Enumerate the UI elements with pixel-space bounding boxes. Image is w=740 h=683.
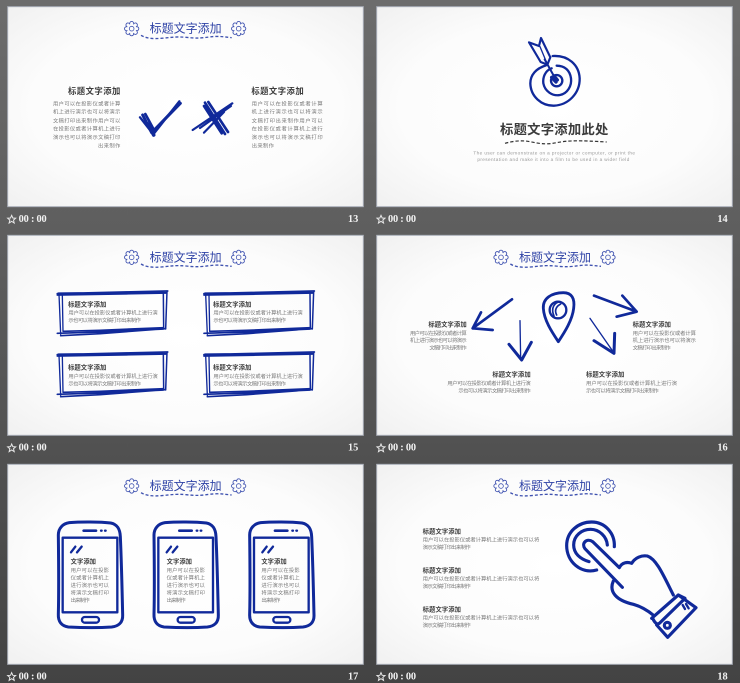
left text block: 在投影仪或者计算机上进行: [53, 125, 121, 133]
slide 17: three phones: [8, 464, 363, 682]
arrow: down: [509, 321, 531, 360]
box: bottom right: [204, 352, 314, 397]
slide title: 标题文字添加: [150, 21, 222, 36]
right text block: 标题文字添加: [251, 86, 304, 96]
text item 3: 演示文稿打印出来制作: [423, 621, 471, 629]
footer: [377, 443, 728, 454]
arrow: down right: [590, 318, 615, 353]
footer: 14: [717, 214, 728, 225]
box: bottom left: 标题文字添加: [68, 362, 106, 371]
phone 1: [58, 522, 123, 628]
text block: right: [633, 319, 697, 351]
footer: 16: [717, 443, 728, 454]
arrow: to right: [594, 296, 637, 317]
right text block: 用户可以在投影仪或者计算: [252, 99, 323, 107]
text block: left: 用户可以在投影仪或者计算: [410, 329, 467, 337]
footer: 18: [717, 671, 728, 682]
phone 1: 出来制作: [71, 596, 90, 604]
footer: [8, 443, 358, 454]
text block: right: 机上进行演示也可以将演示: [633, 336, 696, 344]
footer: 13: [348, 214, 358, 225]
slide title: 标题文字添加: [519, 478, 591, 493]
english description: The user can demonstrate on a projector or computer, or print the: [473, 151, 635, 156]
phone 2: 将演示文稿打印: [167, 589, 205, 597]
text block: left: [410, 319, 467, 351]
phone 1: 文字添加: [71, 557, 96, 566]
box: top left: 用户可以在投影仪或者计算机上进行演: [68, 309, 158, 317]
text block: right: 标题文字添加: [633, 319, 671, 328]
box: bottom right: 示也可以将演示文稿打印出来制作: [213, 379, 287, 387]
slide title: 标题文字添加: [519, 249, 591, 264]
text block: bottom left: 用户可以在投影仪或者计算机上进行演: [447, 379, 531, 387]
box: top right: [204, 291, 314, 336]
right text block: 在投影仪或者计算机上进行: [252, 125, 323, 133]
slide panel: [377, 7, 732, 207]
phone 1: 将演示文稿打印: [71, 589, 109, 597]
phone 2: 进行演示也可以: [167, 581, 206, 589]
phone 1: 进行演示也可以: [71, 581, 110, 589]
footer: 17: [348, 671, 358, 682]
box: top left: [57, 291, 168, 336]
phone 3: 进行演示也可以: [261, 581, 300, 589]
box: top left: 标题文字添加: [68, 299, 106, 308]
right text block: 机上进行演示也可以将演示: [252, 108, 323, 116]
text item 1: [423, 526, 540, 551]
text item 2: 演示文稿打印出来制作: [423, 582, 471, 590]
slide panel: [377, 235, 732, 435]
icon: target with arrow: [529, 38, 580, 106]
english description: presentation and make it into a film to be used in a wider field: [477, 157, 630, 162]
text block: right: 文稿打印出来制作: [633, 343, 671, 351]
slide panel: [8, 7, 363, 207]
slide panel: [377, 464, 732, 664]
slide title: [124, 478, 246, 496]
text item 1: 演示文稿打印出来制作: [423, 543, 471, 551]
slide title: 标题文字添加: [150, 478, 222, 493]
text item 3: [423, 604, 540, 629]
box: bottom left: 示也可以将演示文稿打印出来制作: [68, 379, 142, 387]
footer: 00 : 00: [19, 671, 47, 682]
text item 1: 标题文字添加: [423, 526, 461, 535]
text block: bottom right: 标题文字添加: [586, 370, 624, 379]
text block: right: 用户可以在投影仪或者计算: [633, 329, 697, 337]
text block: left: 机上进行演示也可以将演示: [410, 336, 467, 344]
arrow: to left: [473, 299, 512, 330]
phone 3: 出来制作: [261, 596, 281, 604]
slide 18: touch hand: [377, 464, 732, 682]
text block: left: 文稿打印出来制作: [429, 343, 467, 351]
footer: 00 : 00: [388, 671, 416, 682]
left text block: 演示也可以将演示文稿打印: [53, 133, 120, 141]
footer: 00 : 00: [19, 443, 47, 454]
box: bottom right: 用户可以在投影仪或者计算机上进行演: [213, 372, 303, 380]
slide panel: [8, 235, 363, 435]
phone 3: 用户可以在投影: [261, 566, 300, 574]
box: bottom right: 标题文字添加: [213, 362, 251, 371]
dashed wave: [505, 141, 607, 144]
phone 3: 文字添加: [261, 557, 287, 566]
left text block: 出来制作: [98, 142, 121, 150]
text item 1: 用户可以在投影仪或者计算机上进行演示也可以将: [423, 536, 540, 544]
footer: 00 : 00: [388, 443, 416, 454]
text item 3: 用户可以在投影仪或者计算机上进行演示也可以将: [423, 614, 540, 622]
text block: bottom left: 示也可以将演示文稿打印出来制作: [458, 386, 531, 394]
phone 2: [154, 522, 218, 628]
slide 14: target: [377, 7, 732, 225]
box: top right: 标题文字添加: [213, 299, 251, 308]
slide title: 标题文字添加: [150, 249, 222, 264]
left text block: 标题文字添加: [68, 86, 120, 96]
text block: bottom right: [586, 370, 678, 394]
icon: cross mark: [193, 102, 232, 134]
slide title: [494, 478, 615, 496]
right text block: [251, 86, 323, 150]
phone 2: 仪或者计算机上: [167, 573, 206, 581]
text block: left: 标题文字添加: [428, 319, 467, 328]
box: bottom left: [57, 352, 168, 397]
box: top left: 示也可以将演示文稿打印出来制作: [68, 316, 142, 324]
slide title: [124, 21, 246, 39]
footer: [8, 214, 358, 225]
text item 2: 标题文字添加: [423, 565, 461, 574]
footer: [377, 671, 728, 682]
text block: bottom right: 示也可以将演示文稿打印出来制作: [586, 386, 659, 394]
phone 2: 出来制作: [167, 596, 186, 604]
phone 3: 仪或者计算机上: [261, 573, 300, 581]
slide 13: check and cross: [8, 7, 363, 225]
phone 2: 用户可以在投影: [167, 566, 206, 574]
right text block: 出来制作: [252, 142, 275, 150]
box: top right: 用户可以在投影仪或者计算机上进行演: [213, 309, 303, 317]
slide 16: map pin with arrows: [377, 235, 732, 454]
slide 15: four sketched boxes: [8, 235, 363, 454]
footer: [377, 214, 728, 225]
phone 3: [250, 522, 314, 628]
text item 2: 用户可以在投影仪或者计算机上进行演示也可以将: [423, 575, 540, 583]
right text block: 演示也可以将演示文稿打印: [252, 133, 323, 141]
left text block: [53, 86, 121, 150]
heading: 标题文字添加此处: [500, 121, 609, 137]
footer: 00 : 00: [388, 214, 416, 225]
left text block: 文稿打印出来制作用户可以: [53, 116, 121, 124]
right text block: 文稿打印出来制作用户可以: [252, 116, 323, 124]
phone 1: 仪或者计算机上: [71, 573, 110, 581]
left text block: 机上进行演示也可以将演示: [53, 108, 120, 116]
phone 3: 将演示文稿打印: [261, 589, 300, 597]
box: bottom left: 用户可以在投影仪或者计算机上进行演: [68, 372, 158, 380]
slide panel: [8, 464, 363, 664]
box: top right: 示也可以将演示文稿打印出来制作: [213, 316, 287, 324]
slide title: [494, 249, 615, 267]
icon: map pin: [543, 293, 574, 342]
footer: 00 : 00: [19, 214, 47, 225]
icon: check mark: [140, 101, 180, 135]
english description: [473, 151, 635, 162]
text block: bottom left: 标题文字添加: [492, 370, 531, 379]
text item 2: [423, 565, 540, 590]
phone 1: 用户可以在投影: [71, 566, 110, 574]
footer: 15: [348, 443, 358, 454]
footer: [8, 671, 358, 682]
slide title: [124, 249, 246, 267]
phone 2: 文字添加: [167, 557, 192, 566]
left text block: 用户可以在投影仪或者计算: [53, 99, 121, 107]
text block: bottom right: 用户可以在投影仪或者计算机上进行演: [586, 379, 678, 387]
text item 3: 标题文字添加: [423, 604, 461, 613]
text block: bottom left: [447, 370, 531, 394]
icon: hand tapping: [567, 522, 696, 637]
